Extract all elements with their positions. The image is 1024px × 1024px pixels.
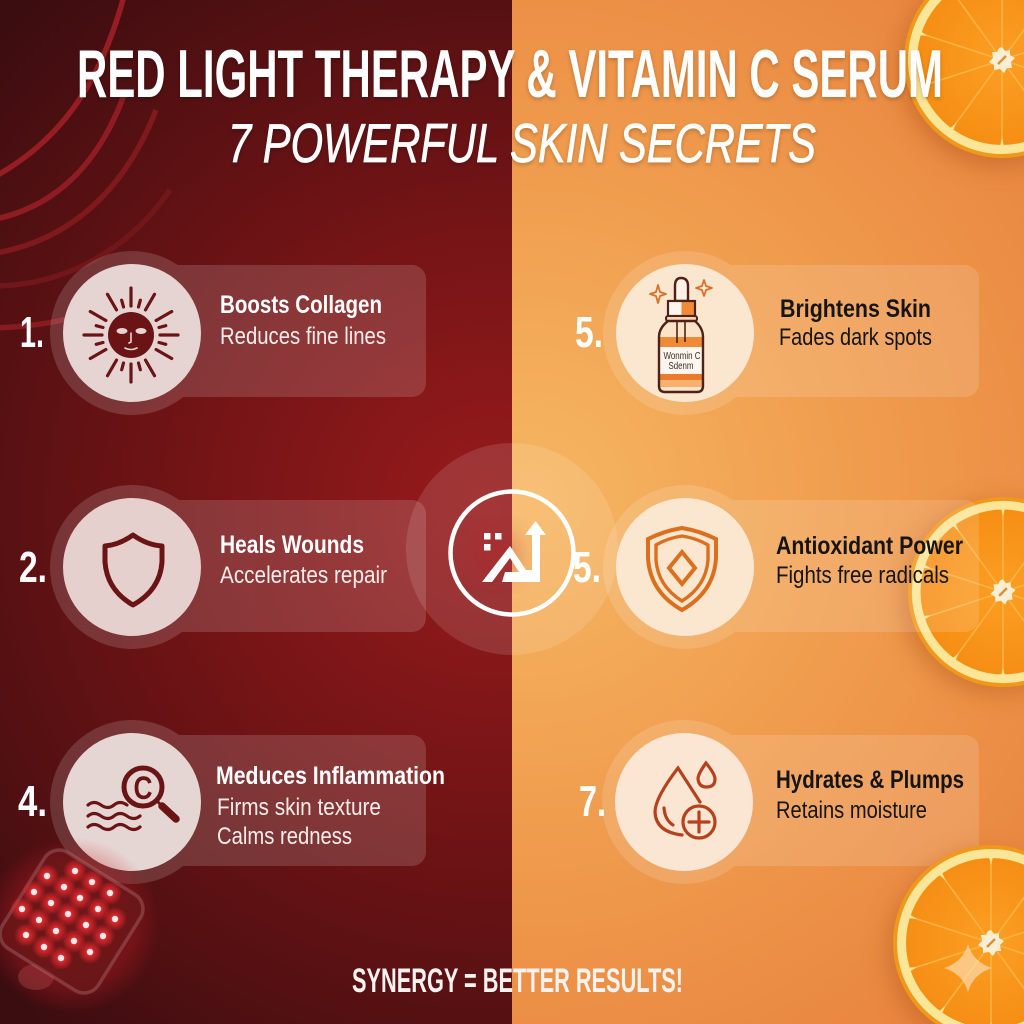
text: heals wounds: Heals Wounds	[220, 531, 364, 559]
number 5 (second): 5.	[573, 543, 601, 592]
text: reduces inflammation: Calms redness	[217, 823, 352, 850]
icon: serum bottle: Wonmin C	[664, 350, 701, 362]
number 4: 4.	[18, 777, 47, 826]
text: antioxidant power: Fights free radicals	[776, 562, 949, 589]
number 7: 7.	[579, 777, 606, 826]
panel: benefit 7 hydrates and plumps	[579, 720, 979, 884]
icon: sparkle	[944, 944, 992, 992]
background: red side	[0, 0, 512, 1024]
icon: serum bottle	[650, 278, 712, 392]
text: boosts collagen	[220, 291, 386, 350]
icon: rising arrow and dots	[482, 521, 546, 582]
number 2: 2.	[19, 543, 47, 592]
icon: shield	[105, 535, 162, 605]
LED grid	[10, 859, 127, 970]
orange slice: top right	[900, 0, 1024, 166]
text: boosts collagen: Reduces fine lines	[220, 323, 386, 350]
text: brightens skin	[779, 295, 932, 351]
center synergy emblem	[406, 443, 618, 655]
light wave arcs	[0, 0, 170, 328]
text: brightens skin: Fades dark spots	[779, 324, 932, 351]
orange slice: bottom right	[888, 845, 1024, 1024]
subtitle: 7 POWERFUL SKIN SECRETS	[228, 112, 816, 174]
icon: double shield with diamond	[648, 528, 716, 610]
footer tagline: SYNERGY = BETTER RESULTS!	[352, 962, 683, 1000]
panel: benefit 6 antioxidant power	[603, 485, 979, 649]
text: reduces inflammation: Firms skin texture	[217, 794, 381, 821]
text: reduces inflammation	[216, 762, 445, 850]
icon: water drops	[655, 763, 715, 838]
icon: sun	[84, 288, 178, 382]
background: orange side	[512, 0, 1024, 1024]
panel: benefit 5 brightens skin	[575, 251, 979, 415]
text: heals wounds: Accelerates repair	[220, 562, 387, 589]
icon: magnifier and waves	[88, 768, 176, 830]
icon: serum bottle: Sdenm	[668, 360, 694, 372]
text: antioxidant power: Antioxidant Power	[776, 532, 963, 560]
text: boosts collagen: Boosts Collagen	[220, 291, 382, 319]
text: heals wounds	[220, 531, 387, 589]
text: brightens skin: Brightens Skin	[780, 295, 931, 323]
text: hydrates and plumps: Hydrates & Plumps	[776, 766, 964, 794]
text: antioxidant power	[776, 532, 963, 589]
panel: benefit 4 reduces inflammation	[18, 720, 445, 884]
icon: magnifier and waves: C	[134, 770, 152, 806]
number 5: 5.	[575, 308, 603, 357]
text: hydrates and plumps	[776, 766, 964, 824]
panel: benefit 2 heals wounds	[19, 485, 426, 649]
orange slice: middle right	[902, 497, 1024, 694]
text: hydrates and plumps: Retains moisture	[776, 797, 927, 824]
text: reduces inflammation: Meduces Inflammation	[216, 762, 445, 790]
number 1: 1.	[20, 308, 44, 357]
panel: benefit 1 boosts collagen	[20, 251, 426, 415]
red light therapy device	[0, 837, 160, 1013]
